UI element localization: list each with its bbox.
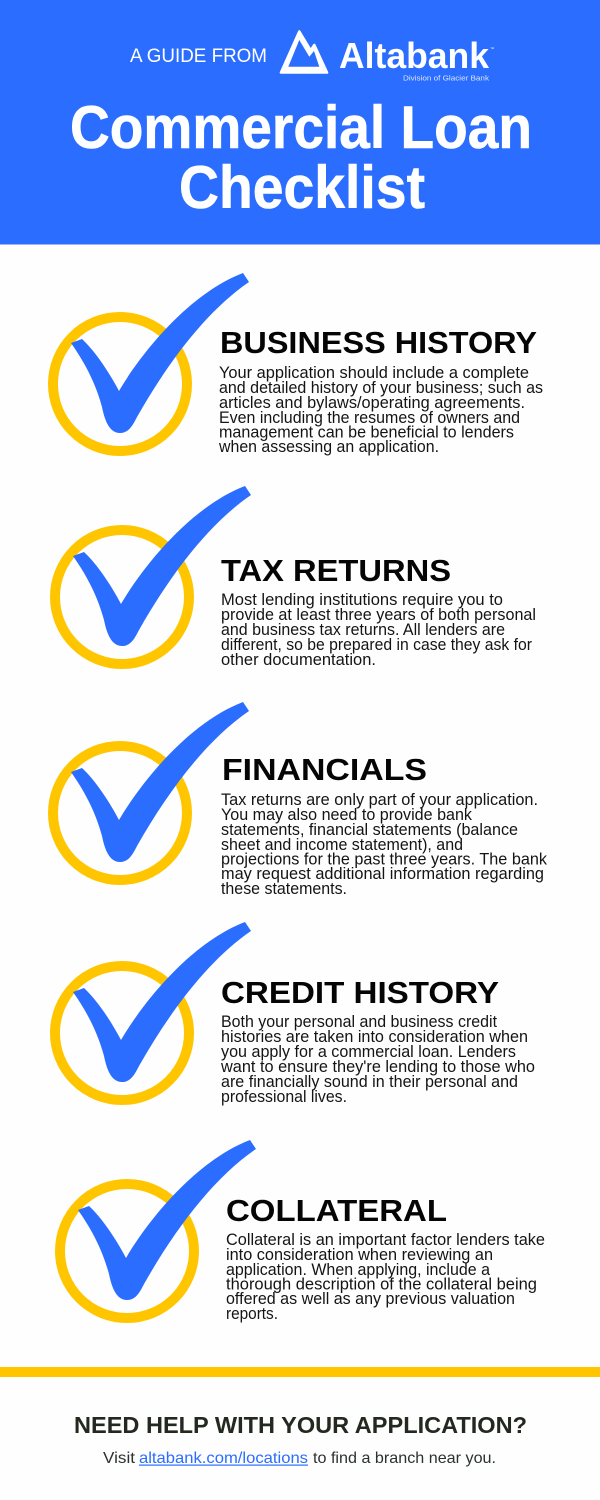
icon: check mark in circle	[55, 922, 251, 1100]
title	[70, 94, 532, 221]
body text: these statements.	[221, 879, 347, 898]
body text: reports.	[226, 1304, 278, 1323]
body text: and business tax returns. All lenders are	[221, 620, 505, 639]
icon: check mark in circle	[53, 273, 249, 451]
panel: tax returns	[55, 486, 536, 669]
footer text with link: to find a branch near you.	[313, 1450, 496, 1467]
body text: into consideration when reviewing an	[226, 1245, 493, 1264]
body text: application. When applying, include a	[226, 1260, 491, 1279]
heading: CREDIT HISTORY	[221, 975, 499, 1010]
body text: offered as well as any previous valuation	[226, 1289, 515, 1308]
icon: Altabank mountain logo	[281, 32, 327, 72]
logo wordmark: Altabank	[339, 35, 490, 76]
panel: business history	[53, 273, 543, 456]
body text: when assessing an application.	[218, 437, 439, 456]
body text	[220, 1012, 535, 1106]
body text: are financially sound in their personal and	[221, 1072, 518, 1091]
body text: thorough description of the collateral being	[226, 1274, 537, 1294]
heading: BUSINESS HISTORY	[220, 325, 537, 360]
body text	[226, 1230, 545, 1323]
body text: may request additional information regarding	[221, 864, 544, 883]
body text: sheet and income statement), and	[221, 835, 463, 854]
body text: Tax returns are only part of your application.	[221, 790, 538, 809]
title: Checklist	[179, 154, 425, 221]
title: Commercial Loan	[70, 94, 532, 161]
footer text with link: Visit	[103, 1450, 136, 1467]
heading: COLLATERAL	[226, 1193, 447, 1228]
body text: Collateral is an important factor lenders take	[226, 1230, 545, 1249]
body text: articles and bylaws/operating agreements.	[219, 393, 525, 412]
body text: Your application should include a complete	[219, 363, 529, 382]
yellow divider bar	[0, 1367, 600, 1377]
body text: provide at least three years of both personal	[221, 605, 536, 624]
body text	[221, 590, 536, 669]
body text: and detailed history of your business; such as	[219, 378, 543, 397]
body text: other documentation.	[221, 650, 376, 669]
body text: Most lending institutions require you to	[221, 590, 503, 609]
body text	[221, 790, 548, 898]
heading: FINANCIALS	[222, 752, 427, 787]
body text: You may also need to provide bank	[221, 805, 473, 824]
body text: Even including the resumes of owners and	[219, 408, 520, 427]
footer text with link	[103, 1450, 496, 1467]
icon: check mark in circle	[53, 702, 249, 880]
body text: Both your personal and business credit	[221, 1012, 497, 1031]
body text: histories are taken into consideration when	[221, 1027, 528, 1046]
panel: header banner	[0, 0, 600, 244]
body text: different, so be prepared in case they ask for	[221, 635, 532, 654]
body text: professional lives.	[221, 1087, 347, 1106]
panel: credit history	[55, 922, 535, 1106]
panel: collateral	[60, 1140, 545, 1323]
body text: statements, financial statements (balance	[221, 820, 518, 839]
text: a guide from: A GUIDE FROM	[130, 45, 267, 67]
panel: financials	[53, 702, 548, 898]
heading: TAX RETURNS	[221, 553, 451, 588]
logo wordmark: Division of Glacier Bank	[403, 74, 489, 82]
body text: want to ensure they're lending to those who	[220, 1057, 535, 1076]
body text: management can be beneficial to lenders	[219, 422, 514, 442]
footer text with link: altabank.com/locations	[139, 1450, 308, 1467]
icon: check mark in circle	[55, 486, 251, 664]
logo wordmark: ™	[490, 46, 494, 51]
panel: footer call to action	[74, 1412, 527, 1467]
icon: check mark in circle	[60, 1140, 256, 1318]
footer heading: NEED HELP WITH YOUR APPLICATION?	[74, 1412, 527, 1438]
body text	[218, 363, 543, 456]
body text: you apply for a commercial loan. Lenders	[221, 1042, 516, 1061]
body text: projections for the past three years. The bank	[221, 850, 548, 868]
